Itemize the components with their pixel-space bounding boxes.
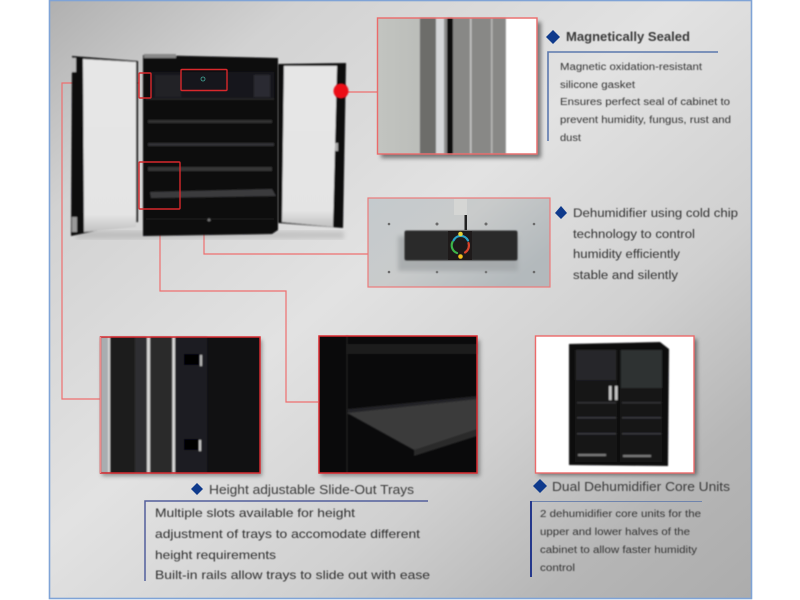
red dot xyxy=(334,84,348,98)
shadow xyxy=(381,22,541,158)
text block: trays: Multiple slots available for height xyxy=(155,506,356,520)
left door xyxy=(71,56,138,236)
text block: dehumidifier: humidity efficiently xyxy=(573,249,680,261)
text block: trays: height requirements xyxy=(155,548,276,562)
right door xyxy=(278,63,346,228)
text block: dehumidifier: Dehumidifier using cold chip xyxy=(573,208,738,220)
text block: trays xyxy=(145,501,430,582)
text block: magnetically sealed: dust xyxy=(560,133,581,144)
indicator on control xyxy=(201,77,205,81)
text block: dehumidifier xyxy=(555,206,738,282)
dehumidifier indicator xyxy=(452,236,469,253)
text block: dual dehumidifier: 2 dehumidifier core units for the xyxy=(540,509,701,520)
open cabinet photo xyxy=(71,54,348,239)
cabinet shadow xyxy=(76,231,344,239)
connector lines xyxy=(62,83,378,402)
text block: dehumidifier: stable and silently xyxy=(573,270,678,282)
text block: dual dehumidifier xyxy=(531,501,702,577)
screws xyxy=(388,222,535,273)
text block: dual dehumidifier: upper and lower halves of the xyxy=(540,527,690,538)
photo: tray slots xyxy=(100,337,262,476)
text block: magnetically sealed: Magnetic oxidation-resistant xyxy=(560,62,702,73)
highlight boxes xyxy=(139,70,227,209)
diamond icon xyxy=(546,30,560,44)
photo: slide-out tray xyxy=(319,336,480,476)
diamond icon xyxy=(533,479,547,493)
text block: magnetically sealed: Ensures perfect seal of cabinet to xyxy=(560,97,730,108)
text block: magnetically sealed xyxy=(548,52,731,144)
text block: dual dehumidifier: cabinet to allow faster humidity xyxy=(540,545,697,556)
text block: dual dehumidifier: control xyxy=(540,563,575,574)
heading: dual dehumidifier: Dual Dehumidifier Core Units xyxy=(552,479,731,494)
text block: trays: Built-in rails allow trays to slide out with ease xyxy=(155,568,430,582)
heading: magnetically sealed: Magnetically Sealed xyxy=(566,30,690,44)
photo: closed cabinet xyxy=(536,336,697,475)
text block: dehumidifier: technology to control xyxy=(573,229,695,241)
cabinet body xyxy=(143,54,278,236)
text block: magnetically sealed: prevent humidity, fungus, rust and xyxy=(560,115,731,126)
heading: height adjustable trays: Height adjustable Slide-Out Trays xyxy=(209,483,414,497)
text block: magnetically sealed: silicone gasket xyxy=(560,80,635,91)
diamond icon xyxy=(555,206,567,219)
diamond icon xyxy=(191,483,203,495)
photo: dehumidifier control xyxy=(368,198,550,287)
text block: trays: adjustment of trays to accomodate different xyxy=(155,527,421,541)
photo: magnetic seal xyxy=(378,18,541,158)
